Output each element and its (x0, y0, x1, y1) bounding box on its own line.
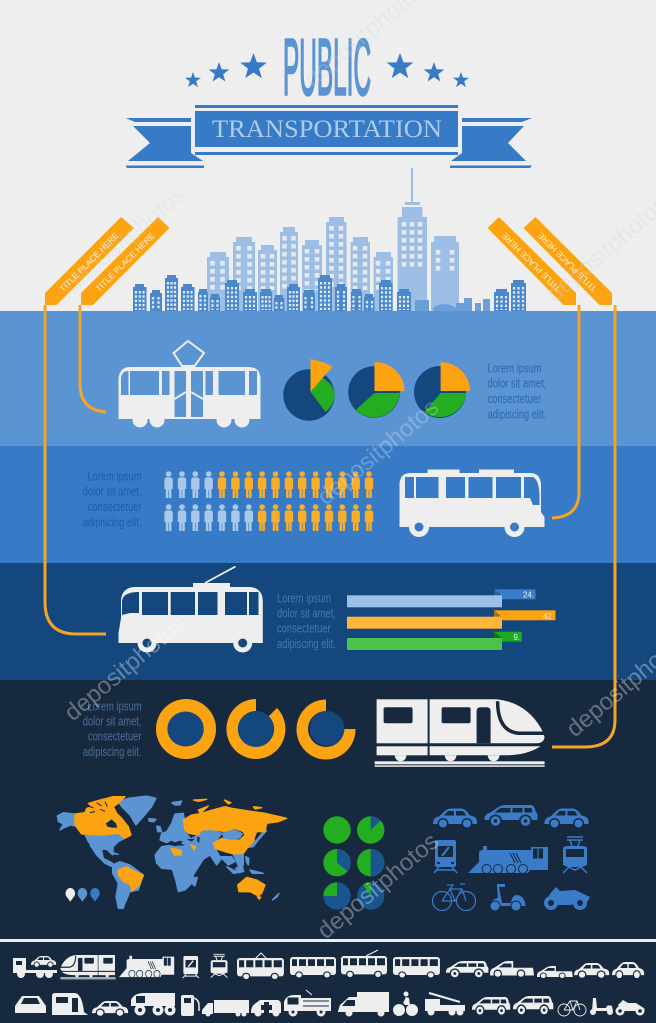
people row 1 (164, 471, 373, 498)
map: Americas (57, 796, 156, 908)
tag 4 (524, 217, 612, 305)
bottom icon strip (13, 950, 645, 1017)
stars (185, 53, 469, 87)
chart: six small pies (323, 816, 384, 910)
text block: band 2: dolor sit amet, (83, 485, 142, 499)
text block: band 1 (488, 362, 546, 422)
text block: band 4: adipiscing elit. (83, 746, 142, 759)
text block: band 1: Lorem ipsum (488, 362, 542, 376)
tag 4: TITLE PLACE HERE (535, 230, 599, 294)
background: band 3 (0, 563, 656, 680)
text block: band 1: adipiscing elit. (488, 408, 546, 422)
icon: van small (472, 997, 510, 1016)
icon: tram (118, 341, 260, 428)
text block: band 1: consectetuer (488, 393, 541, 406)
text block: band 3 (277, 592, 336, 651)
watermark: upper left: depositphotos (59, 181, 191, 298)
text block: band 1: dolor sit amet, (488, 377, 546, 391)
icon: tram small (237, 953, 284, 980)
bar: 9 (347, 632, 522, 650)
title tags (45, 217, 612, 305)
donut 1 (156, 699, 216, 759)
tag 1 (45, 217, 134, 305)
tag 3 (488, 217, 576, 305)
bar: 42 (347, 610, 556, 629)
text block: band 4: consectetuer (88, 730, 142, 744)
connector: title 1 to trolleybus (45, 305, 106, 634)
small pie 1 (323, 816, 351, 844)
background: sky (0, 0, 656, 311)
text block: band 4: Lorem ipsum (87, 700, 142, 714)
icon: train front (434, 840, 457, 873)
map pins (65, 888, 100, 902)
orange connector lines (45, 305, 615, 747)
text block: band 2: consectetuer (88, 501, 142, 514)
text block: band 3: adipiscing elit. (277, 638, 336, 651)
icon: convertible (537, 966, 573, 979)
pie 2 (348, 362, 404, 418)
ribbon (126, 105, 532, 168)
icon: scooter (490, 884, 526, 912)
icon: car (433, 808, 477, 829)
icon: tow truck (13, 956, 57, 978)
small pie 2 (357, 816, 384, 844)
row 2 icons (15, 990, 645, 1017)
pie 1 (283, 359, 335, 421)
text block: band 2 (83, 470, 142, 530)
ribbon text: TRANSPORTATION (212, 116, 442, 143)
icon: dump truck (131, 993, 176, 1016)
icon: locomotive small (119, 956, 174, 978)
chart: three pies (283, 359, 470, 421)
text block: band 2: Lorem ipsum (87, 470, 142, 484)
city skyline (133, 168, 526, 311)
front building windows (136, 282, 523, 310)
icon: tram front small (211, 954, 228, 978)
icon: semi truck (202, 1000, 249, 1016)
back buildings (207, 168, 459, 311)
tag 3: TITLE PLACE HERE (499, 230, 563, 294)
text block: band 2: adipiscing elit. (83, 516, 142, 530)
icon: cyclist (393, 992, 418, 1016)
icon: train front small (183, 956, 199, 978)
bar: 24: 24. (523, 590, 534, 600)
chart: people pictogram (164, 471, 373, 531)
tag 1: TITLE PLACE HERE (57, 230, 121, 294)
front buildings (133, 275, 526, 311)
chart: three donuts (156, 699, 356, 760)
watermark: bottom centre: depositphotos (312, 828, 444, 945)
bar: 9: 9. (513, 633, 520, 642)
icon: bicycle small (558, 1001, 586, 1016)
row 1 icons (13, 950, 644, 980)
icon: motorcycle small (616, 1000, 645, 1016)
title block (126, 24, 532, 168)
back building windows (212, 222, 452, 290)
text block: band 3: dolor sit amet, (277, 607, 336, 621)
background: band 2 (0, 446, 656, 563)
icon: camper (513, 996, 553, 1016)
map: Eurasia, Africa, Australia (155, 799, 287, 900)
icon: taxi (92, 1001, 128, 1017)
small pie 3 (323, 849, 351, 876)
icon: gas pump (181, 995, 199, 1016)
title: PUBLIC: PUBLIC (283, 24, 371, 112)
vehicle icon grid (432, 805, 590, 912)
icon: box van (338, 992, 389, 1016)
icon: bus small (290, 957, 336, 979)
tag 2 (81, 217, 170, 305)
background: band 1 (0, 311, 656, 446)
icon: scooter small (590, 998, 613, 1015)
watermark: centre: depositphotos (312, 394, 444, 511)
background: band 4 (0, 680, 656, 1023)
icon: motorcycle (544, 887, 590, 910)
pie 3 (414, 362, 470, 418)
small pie 4 (357, 849, 384, 876)
icon: bullet train (375, 699, 545, 767)
tag 2: TITLE PLACE HERE (93, 230, 157, 294)
text block: band 3: Lorem ipsum (277, 592, 331, 606)
text block: band 3: consectetuer (277, 622, 331, 636)
icon: sports car front (15, 996, 46, 1013)
icon: caravan (52, 993, 88, 1015)
small buildings and bridge (415, 298, 490, 311)
icon: pickup (490, 961, 534, 978)
bar: 24 (347, 589, 536, 607)
icon: tram front (563, 837, 587, 873)
icon: bicycle (432, 884, 476, 910)
text block: band 4: dolor sit amet, (83, 715, 142, 729)
small pie 5 (323, 882, 351, 910)
icon: trolleybus (118, 566, 263, 652)
icon: steam locomotive (468, 846, 548, 874)
donut 2 (226, 699, 285, 759)
watermark: lower left: depositphotos (59, 610, 191, 727)
connector: title 4 to train (552, 305, 615, 747)
icon: coach small (393, 957, 440, 979)
icon: trolleybus small (341, 950, 387, 978)
text block: band 4 (83, 700, 142, 759)
world map (57, 796, 287, 908)
icon: bullet train small (60, 955, 116, 979)
donut 3 (297, 700, 356, 760)
icon: ambulance (251, 1000, 281, 1016)
small pie 6 (357, 882, 384, 910)
bar: 42: 42 (543, 612, 553, 621)
connector: title 3 to bus (552, 305, 579, 518)
icon: van (446, 961, 488, 979)
icon: minivan small (612, 962, 644, 979)
people row 2 (164, 504, 373, 531)
icon: bus (400, 470, 544, 537)
icon: car small (574, 963, 609, 979)
icon: fire truck (284, 990, 331, 1016)
chart: horizontal bars (347, 589, 556, 650)
icon: crane truck (425, 993, 465, 1016)
connector: title 2 to tram (80, 305, 106, 412)
icon: suv (484, 805, 538, 828)
divider line (0, 939, 656, 942)
icon: small car (544, 808, 588, 829)
